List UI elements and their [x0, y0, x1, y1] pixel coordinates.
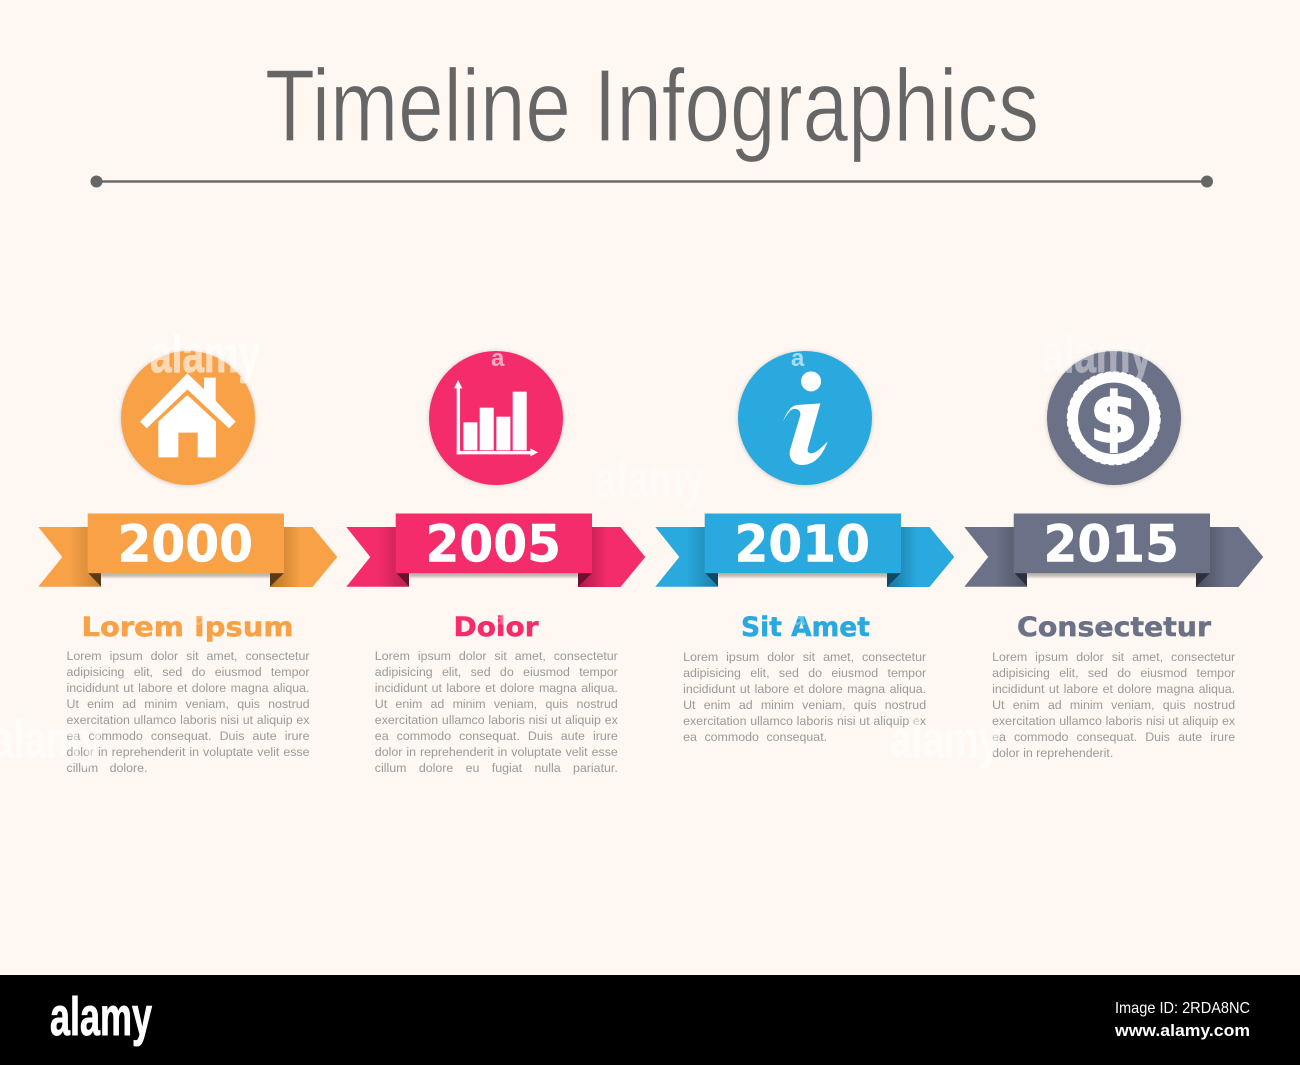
body text: ea commodo consequat. [683, 730, 827, 744]
ribbon: 2000: 2000 [118, 516, 253, 574]
body text: dolor in reprehenderit. [992, 746, 1113, 760]
body text: incididunt ut labore et dolore magna aliqua. [375, 681, 618, 695]
ribbon: 2015: 2015 [1043, 516, 1179, 574]
body text: incididunt ut labore et dolore magna aliqua. [66, 681, 310, 695]
body text: cillum dolore. [66, 761, 148, 775]
body text: Ut enim ad minim veniam, quis nostrud [992, 698, 1235, 712]
ribbon: 2010: 2010 [734, 516, 870, 574]
title rule [90, 176, 1213, 188]
body text: exercitation ullamco laboris nisi ut aliquip ex [375, 713, 618, 727]
watermark overlay: a [193, 604, 207, 631]
body text: exercitation ullamco laboris nisi ut aliquip ex [683, 714, 926, 728]
body text: dolor in reprehenderit in voluptate velit esse [66, 745, 310, 759]
panel: 2005 [346, 350, 646, 775]
body text [375, 649, 618, 775]
panel: 2000 [38, 350, 338, 775]
icon: info in blue circle [737, 350, 873, 486]
body text: Ut enim ad minim veniam, quis nostrud [66, 697, 310, 711]
body text: Lorem ipsum dolor sit amet, consectetur [683, 650, 926, 664]
body text: Lorem ipsum dolor sit amet, consectetur [992, 650, 1235, 664]
icon: dollar coin in grey circle: $ [1090, 380, 1137, 459]
footer bar [0, 975, 1300, 1065]
body text: incididunt ut labore et dolore magna aliqua. [992, 682, 1235, 696]
body text: cillum dolore eu fugiat nulla pariatur. [375, 761, 618, 775]
ribbon: 2000 [38, 514, 337, 587]
image id: Image ID: 2RDA8NC [1115, 1000, 1250, 1017]
body text: ea commodo consequat. Duis aute irure [992, 730, 1235, 744]
body text: Lorem ipsum dolor sit amet, consectetur [375, 649, 618, 663]
watermark overlay: a [491, 345, 505, 372]
heading: Lorem Ipsum [82, 612, 294, 643]
watermark overlay: a [792, 604, 806, 631]
watermark overlay: alamy [595, 451, 705, 509]
body text: Ut enim ad minim veniam, quis nostrud [375, 697, 618, 711]
watermark overlay: a [791, 345, 805, 372]
footer logo: alamy [50, 987, 152, 1047]
body text [992, 650, 1235, 760]
body text: exercitation ullamco laboris nisi ut aliquip ex [66, 713, 310, 727]
icon: bar chart in pink circle [428, 350, 564, 486]
ribbon: 2005: 2005 [426, 516, 561, 574]
heading: Sit Amet [741, 612, 870, 643]
watermark overlay: alamy [890, 711, 1000, 769]
title and rule [90, 48, 1213, 188]
body text [66, 649, 310, 775]
watermark overlay: alamy [1042, 326, 1152, 384]
icon: house in orange circle [120, 350, 256, 486]
watermark overlay: alamy [150, 326, 260, 384]
ribbon: 2005 [347, 514, 646, 587]
body text: ea commodo consequat. Duis aute irure [375, 729, 618, 743]
body text: exercitation ullamco laboris nisi ut aliquip ex [992, 714, 1235, 728]
body text: adipisicing elit, sed do eiusmod tempor [683, 666, 926, 680]
heading: Consectetur [1017, 612, 1211, 643]
ribbon: 2010 [655, 514, 954, 587]
body text: ea commodo consequat. Duis aute irure [66, 729, 310, 743]
heading: Dolor [454, 612, 539, 643]
website: www.alamy.com [1114, 1021, 1250, 1040]
watermark overlay: a [1092, 604, 1106, 631]
body text: adipisicing elit, sed do eiusmod tempor [375, 665, 618, 679]
watermark overlay: a [492, 604, 506, 631]
body text: Lorem ipsum dolor sit amet, consectetur [66, 649, 310, 663]
body text: Ut enim ad minim veniam, quis nostrud [683, 698, 926, 712]
body text: dolor in reprehenderit in voluptate velit esse [375, 745, 618, 759]
body text [683, 650, 926, 744]
icon: dollar coin in grey circle [1046, 350, 1182, 486]
ribbon: 2015 [964, 514, 1263, 587]
body text: incididunt ut labore et dolore magna aliqua. [683, 682, 926, 696]
title: Timeline Infographics [265, 48, 1039, 163]
panel: 2010 [655, 350, 954, 744]
body text: adipisicing elit, sed do eiusmod tempor [992, 666, 1235, 680]
body text: adipisicing elit, sed do eiusmod tempor [66, 665, 310, 679]
panel: 2015 [964, 350, 1264, 760]
